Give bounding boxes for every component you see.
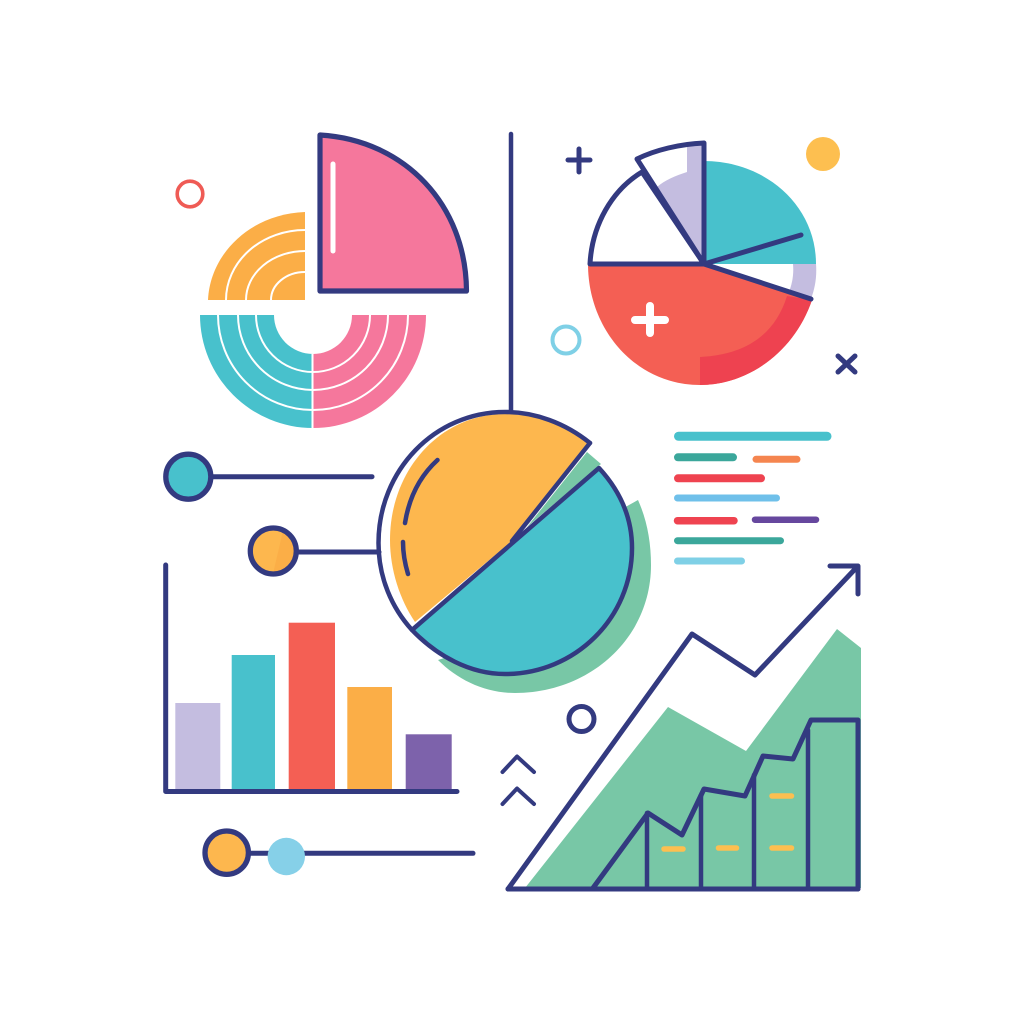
connector: orange node — [250, 528, 379, 574]
slice: red — [588, 264, 812, 385]
bar dividers — [647, 730, 808, 888]
chart: top right pie — [588, 143, 816, 385]
pie outer outline — [378, 412, 590, 630]
chart: teal and pink half ring — [200, 315, 426, 428]
green area — [525, 629, 861, 888]
icon: small red ring — [177, 181, 203, 207]
slice: exploded outline — [637, 143, 704, 264]
chart: central pie — [378, 412, 651, 693]
bar chart — [166, 565, 457, 792]
icon: orange dot — [806, 137, 840, 171]
icon: light blue ring — [552, 326, 580, 354]
stepped bars outline — [593, 720, 858, 889]
pie spokes — [704, 235, 811, 299]
slice divider — [512, 443, 590, 541]
vertical connector line — [509, 134, 513, 411]
slice: white right — [704, 264, 793, 292]
slice: white left — [590, 172, 704, 264]
slice: dark red shade — [700, 296, 812, 385]
shadow wedge — [527, 452, 601, 527]
slice: teal — [704, 161, 816, 264]
icon: plus — [568, 149, 590, 172]
icon: ring — [569, 706, 594, 732]
chart: growth area and arrow — [508, 566, 861, 889]
slice: lavender right — [704, 264, 816, 299]
connector: teal node — [166, 454, 372, 499]
chart: pink quarter pie — [320, 135, 466, 291]
shadow crescent — [438, 500, 651, 693]
slice: orange — [390, 414, 590, 622]
slice: teal — [412, 468, 632, 674]
chart: orange concentric quarter — [208, 212, 305, 300]
trend arrow line — [508, 567, 857, 889]
slider connector — [205, 831, 473, 875]
baseline — [508, 886, 858, 892]
icon: double chevrons — [502, 756, 534, 804]
icon: white plus — [635, 306, 665, 333]
slice: lavender exploded fill — [657, 145, 704, 264]
arrow head — [830, 566, 858, 594]
text lines block — [678, 436, 827, 561]
orange dashes — [664, 796, 792, 849]
dashed highlight arc — [403, 460, 438, 574]
icon: cross — [838, 356, 855, 372]
